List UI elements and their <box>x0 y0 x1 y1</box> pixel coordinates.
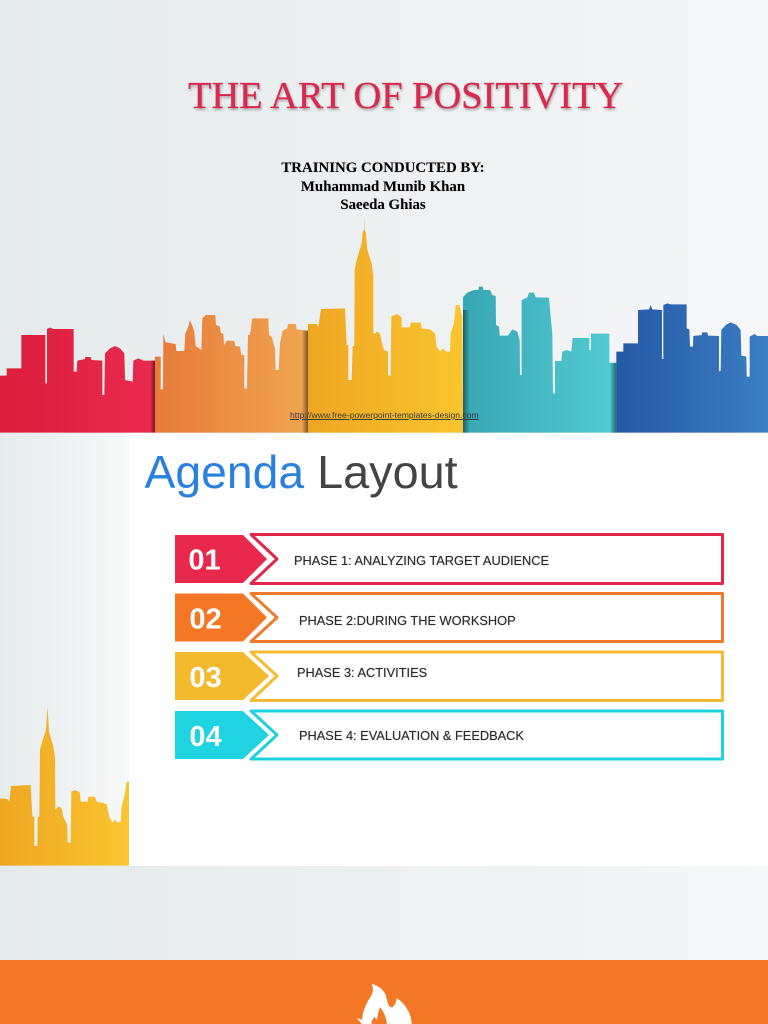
text block: training credits: Muhammad Munib Khan <box>301 178 465 194</box>
row 04 <box>175 711 722 759</box>
row 03 <box>175 652 722 700</box>
skyline: orange <box>155 315 308 433</box>
text: phase 1: PHASE 1: ANALYZING TARGET AUDIENCE <box>294 553 549 568</box>
heading: agenda layout: Agenda Layout <box>144 446 458 498</box>
panel: orange footer band <box>0 960 768 1024</box>
title: THE ART OF POSITIVITY <box>188 75 623 117</box>
skyline: red <box>0 328 155 433</box>
icon: flame <box>356 984 412 1024</box>
skyline: blue <box>616 303 768 433</box>
row 01: 01 <box>188 544 221 576</box>
text block: source url: http://www.free-powerpoint-templates-design.com <box>290 410 479 420</box>
skyline: teal <box>463 287 616 433</box>
text: phase 3: PHASE 3: ACTIVITIES <box>297 665 427 680</box>
row 01 <box>175 534 722 584</box>
panel: agenda list <box>175 533 724 760</box>
text block: training credits <box>281 160 485 212</box>
text: phase 4: PHASE 4: EVALUATION & FEEDBACK <box>299 728 524 743</box>
row 04: 04 <box>189 721 222 753</box>
panel: next slide top band <box>0 866 768 960</box>
row 02 <box>175 594 722 642</box>
chart: colourful city skyline <box>0 217 768 433</box>
skyline: yellow <box>308 217 463 433</box>
panel: title slide background <box>0 0 768 433</box>
text block: training credits: Saeeda Ghias <box>340 196 426 212</box>
panel: agenda left sidebar <box>0 433 129 866</box>
text: phase 2: PHASE 2:DURING THE WORKSHOP <box>299 613 516 628</box>
row 02: 02 <box>189 604 222 636</box>
text block: training credits: TRAINING CONDUCTED BY: <box>281 160 485 176</box>
row 03: 03 <box>189 662 222 694</box>
icon: yellow skyline <box>0 707 129 866</box>
